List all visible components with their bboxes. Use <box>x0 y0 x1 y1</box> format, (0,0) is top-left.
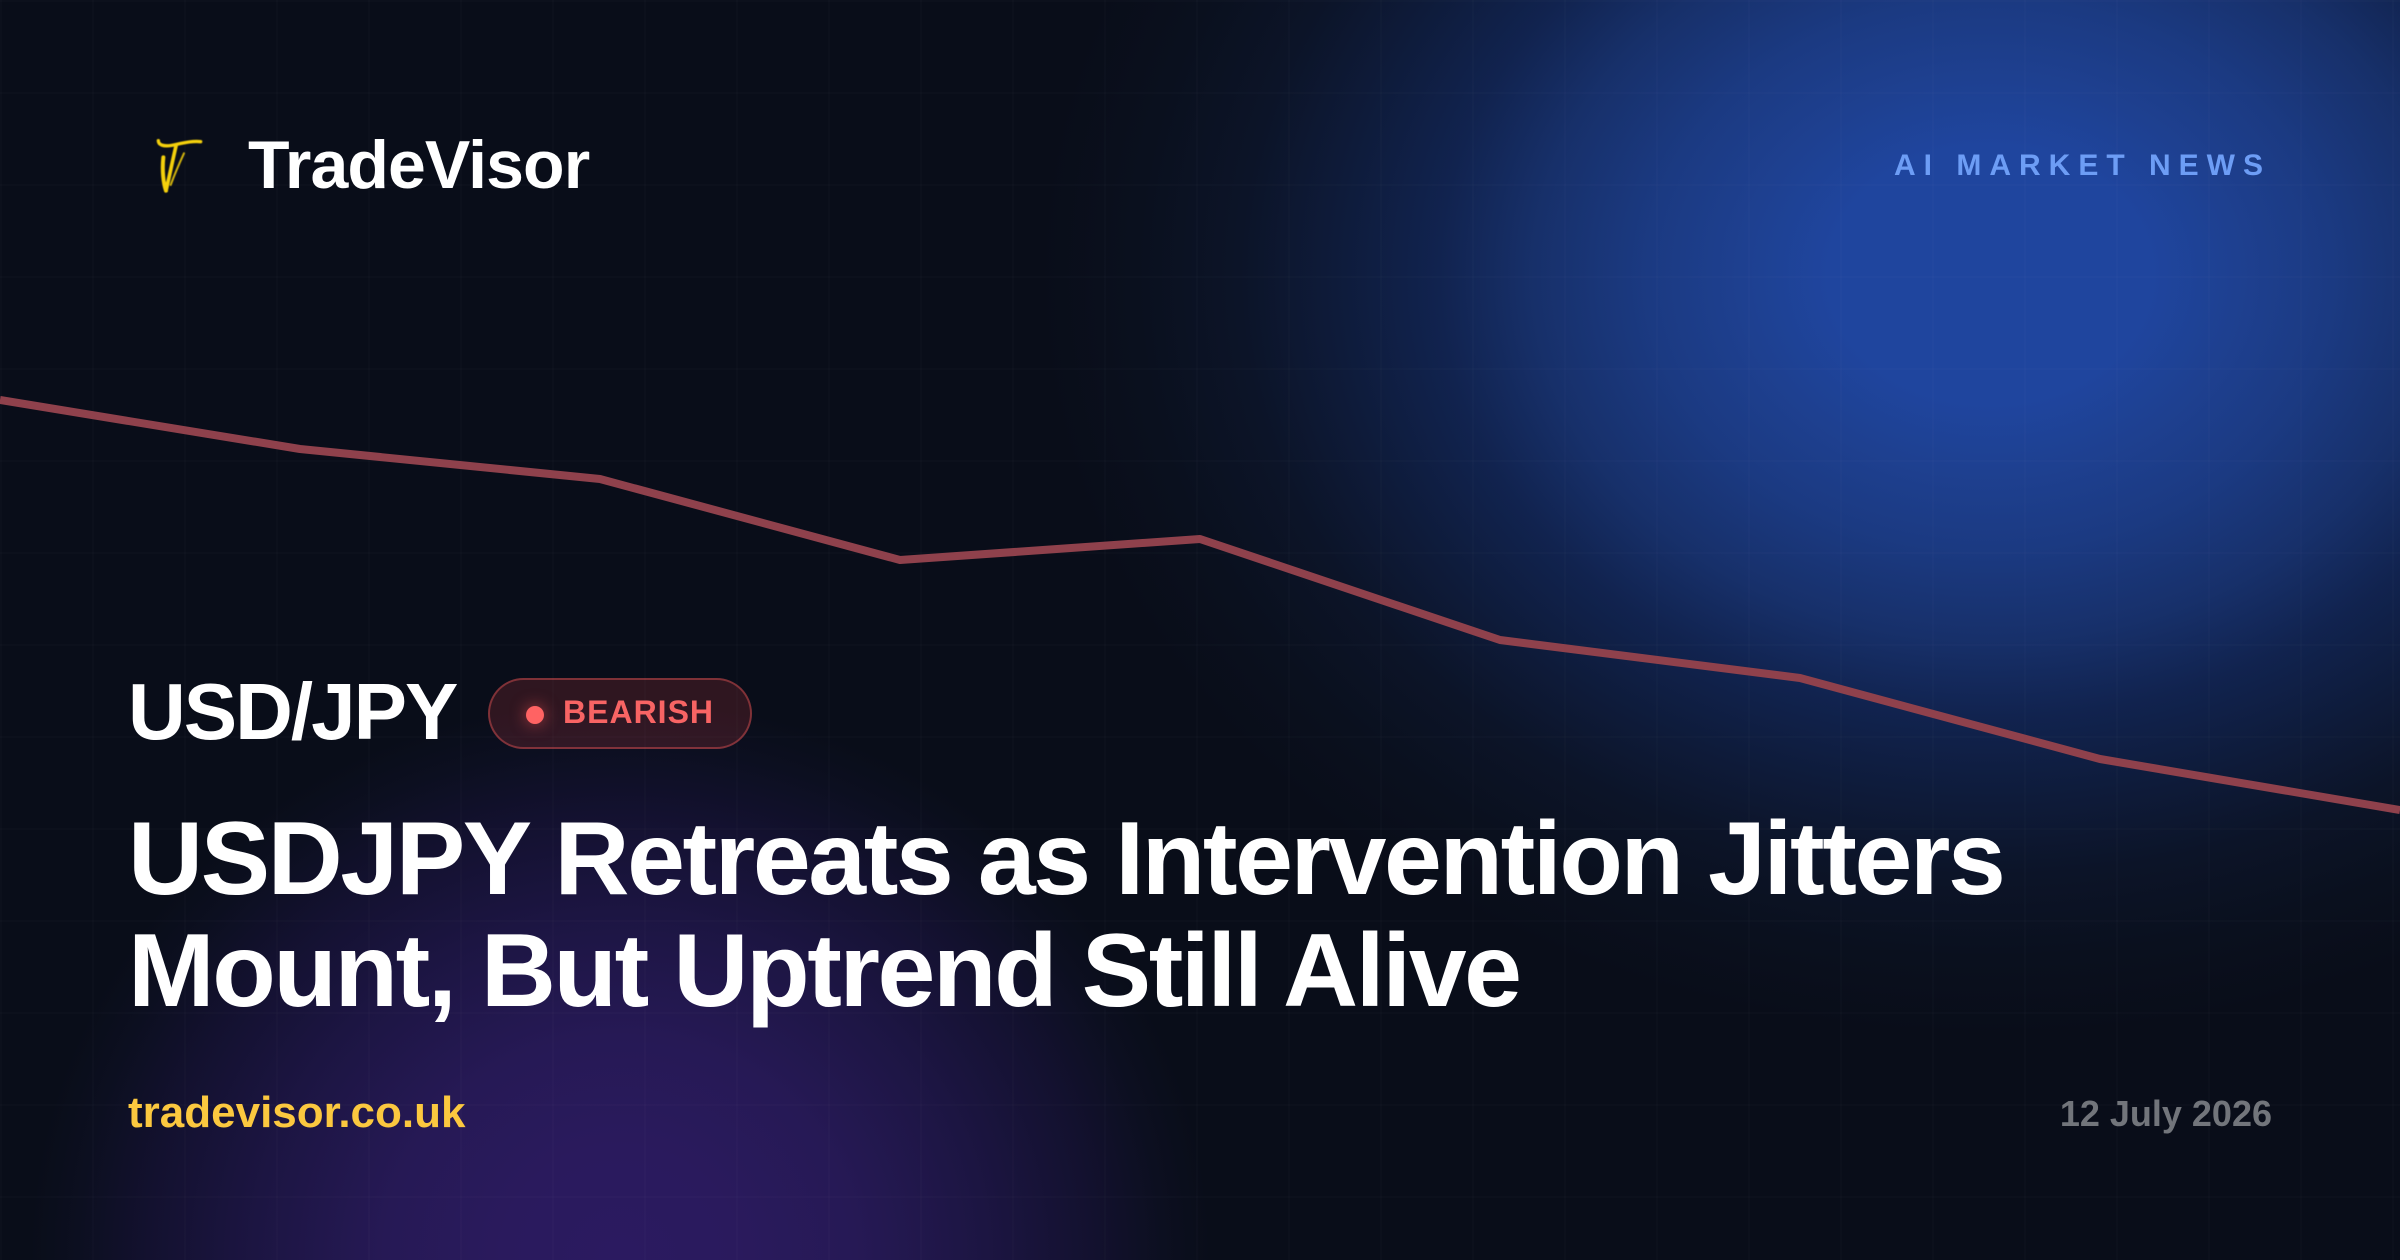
headline: USDJPY Retreats as Intervention Jitters <box>128 801 2003 917</box>
brand name: TradeVisor <box>248 127 589 203</box>
bearish dot <box>526 706 544 724</box>
headline: Mount, But Uptrend Still Alive <box>128 913 1520 1029</box>
badge: bearish <box>488 678 752 749</box>
bearish text: BEARISH <box>563 694 714 730</box>
headline <box>128 801 2003 1029</box>
pair name: USD/JPY <box>128 667 456 756</box>
icon: TradeVisor logo <box>156 138 204 194</box>
date: 12 July 2026 <box>2060 1093 2272 1134</box>
label: AI Market News: AI MARKET NEWS <box>1894 149 2271 182</box>
website: tradevisor.co.uk <box>128 1088 465 1137</box>
